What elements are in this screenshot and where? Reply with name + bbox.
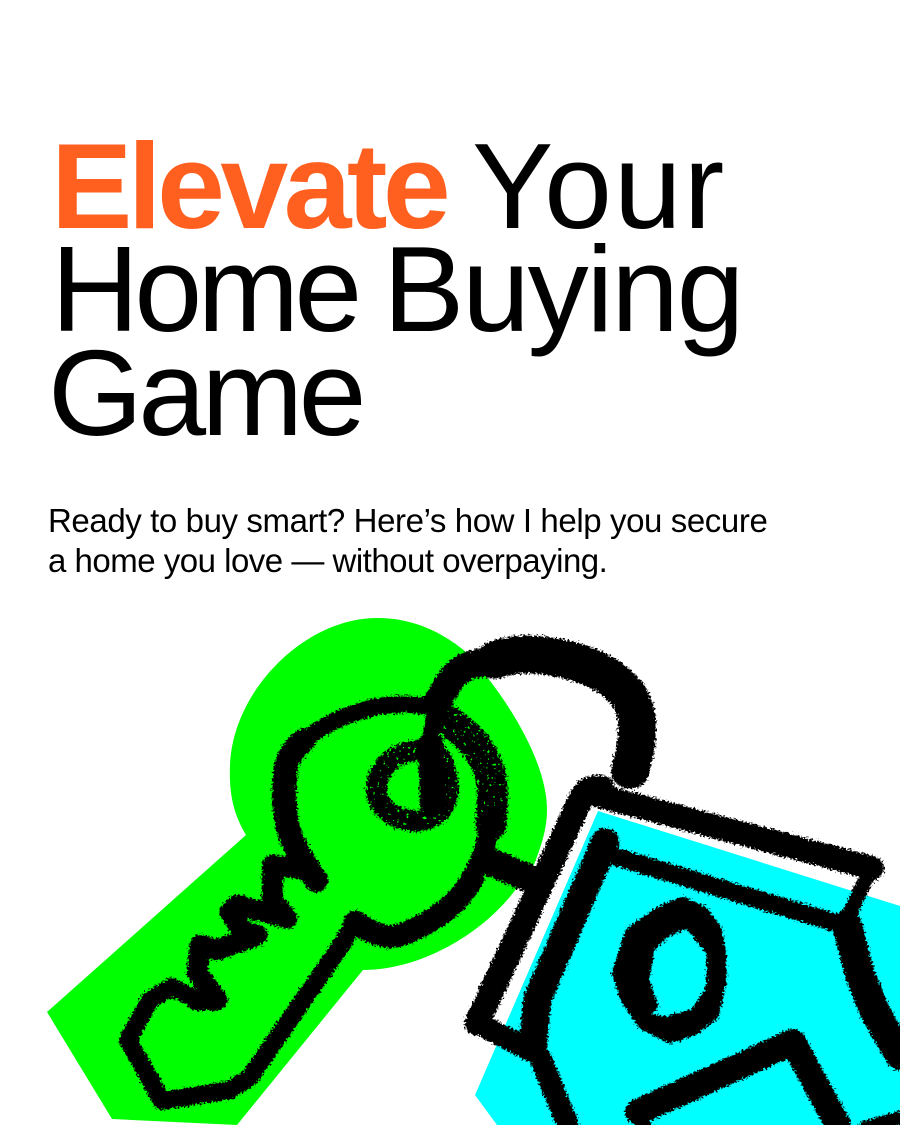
sketched key outline [128, 704, 526, 1101]
subtitle: a home you love — without overpaying. [48, 542, 607, 579]
sketched house tag outline [477, 787, 900, 1125]
green key shape [47, 618, 547, 1125]
cyan tag shape [475, 811, 900, 1125]
title: Home [51, 221, 357, 357]
title: Buying [383, 221, 742, 357]
title: Your [472, 118, 726, 254]
subtitle: Ready to buy smart? Here’s how I help you secure [48, 502, 767, 539]
title: Game [48, 325, 362, 461]
title: Elevate [51, 118, 446, 254]
sketched tag hole [613, 898, 725, 1042]
crayon textured key bands [377, 718, 492, 825]
sketched keyring loop [436, 655, 637, 770]
subtitle [48, 502, 767, 579]
title [48, 118, 742, 461]
